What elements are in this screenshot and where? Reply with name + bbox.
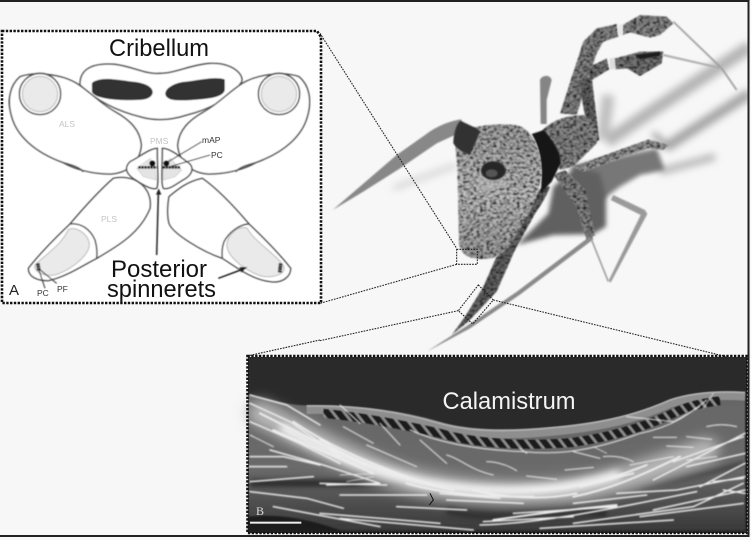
anterior lateral spinneret right (178, 73, 310, 174)
posterior lateral spinneret right (168, 178, 291, 282)
anatomical labels: PMS (150, 136, 169, 146)
bottom left dark (248, 516, 343, 532)
spider thorax (540, 115, 597, 170)
calamistrum comb teeth (323, 401, 720, 444)
zoom guide lines (320, 33, 733, 358)
panel letter A: A (9, 282, 19, 299)
anatomical labels: PC (37, 288, 49, 298)
dark lower strands (250, 463, 745, 515)
arrow: to posterior median spinnerets (156, 188, 161, 255)
label: Posterior spinnerets: Posterior (111, 256, 207, 283)
posterior lateral spinneret left (28, 177, 150, 281)
label: Posterior spinnerets: spinnerets (107, 276, 216, 303)
scale bar (250, 522, 301, 524)
anatomical labels: PC (211, 150, 223, 160)
anatomical labels: mAP (202, 135, 221, 145)
anterior lateral spinneret left (9, 73, 141, 174)
upper margin (307, 392, 745, 435)
spider head (453, 121, 542, 259)
panel frame (2, 31, 321, 303)
posterior median spinnerets (127, 148, 192, 189)
cribellum plate (80, 63, 242, 119)
heading: Cribellum: Cribellum (109, 35, 209, 62)
spider legs (333, 15, 737, 335)
anatomical labels: PLS (101, 214, 117, 224)
anatomical labels (37, 119, 223, 298)
panel A: spinneret diagram (2, 31, 321, 303)
anatomical labels: PF (57, 284, 68, 294)
heading: Calamistrum: Calamistrum (442, 388, 576, 415)
photo: spider with shadows (320, 15, 750, 358)
guide line end (247, 340, 320, 356)
label: Posterior spinnerets (107, 256, 216, 303)
hairs (248, 393, 745, 530)
spider shadow (393, 47, 750, 352)
spider band (532, 130, 561, 193)
panel frame (248, 356, 748, 533)
leg surface (248, 391, 745, 530)
leader lines (38, 142, 210, 288)
bright hair mass (260, 413, 707, 493)
panel B: calamistrum micrograph (248, 356, 748, 533)
panel letter B: B (256, 504, 264, 518)
anatomical labels: ALS (59, 119, 75, 129)
arrow: to posterior lateral spinneret (218, 267, 247, 278)
micrograph background (248, 357, 747, 533)
hair joint (429, 493, 433, 505)
